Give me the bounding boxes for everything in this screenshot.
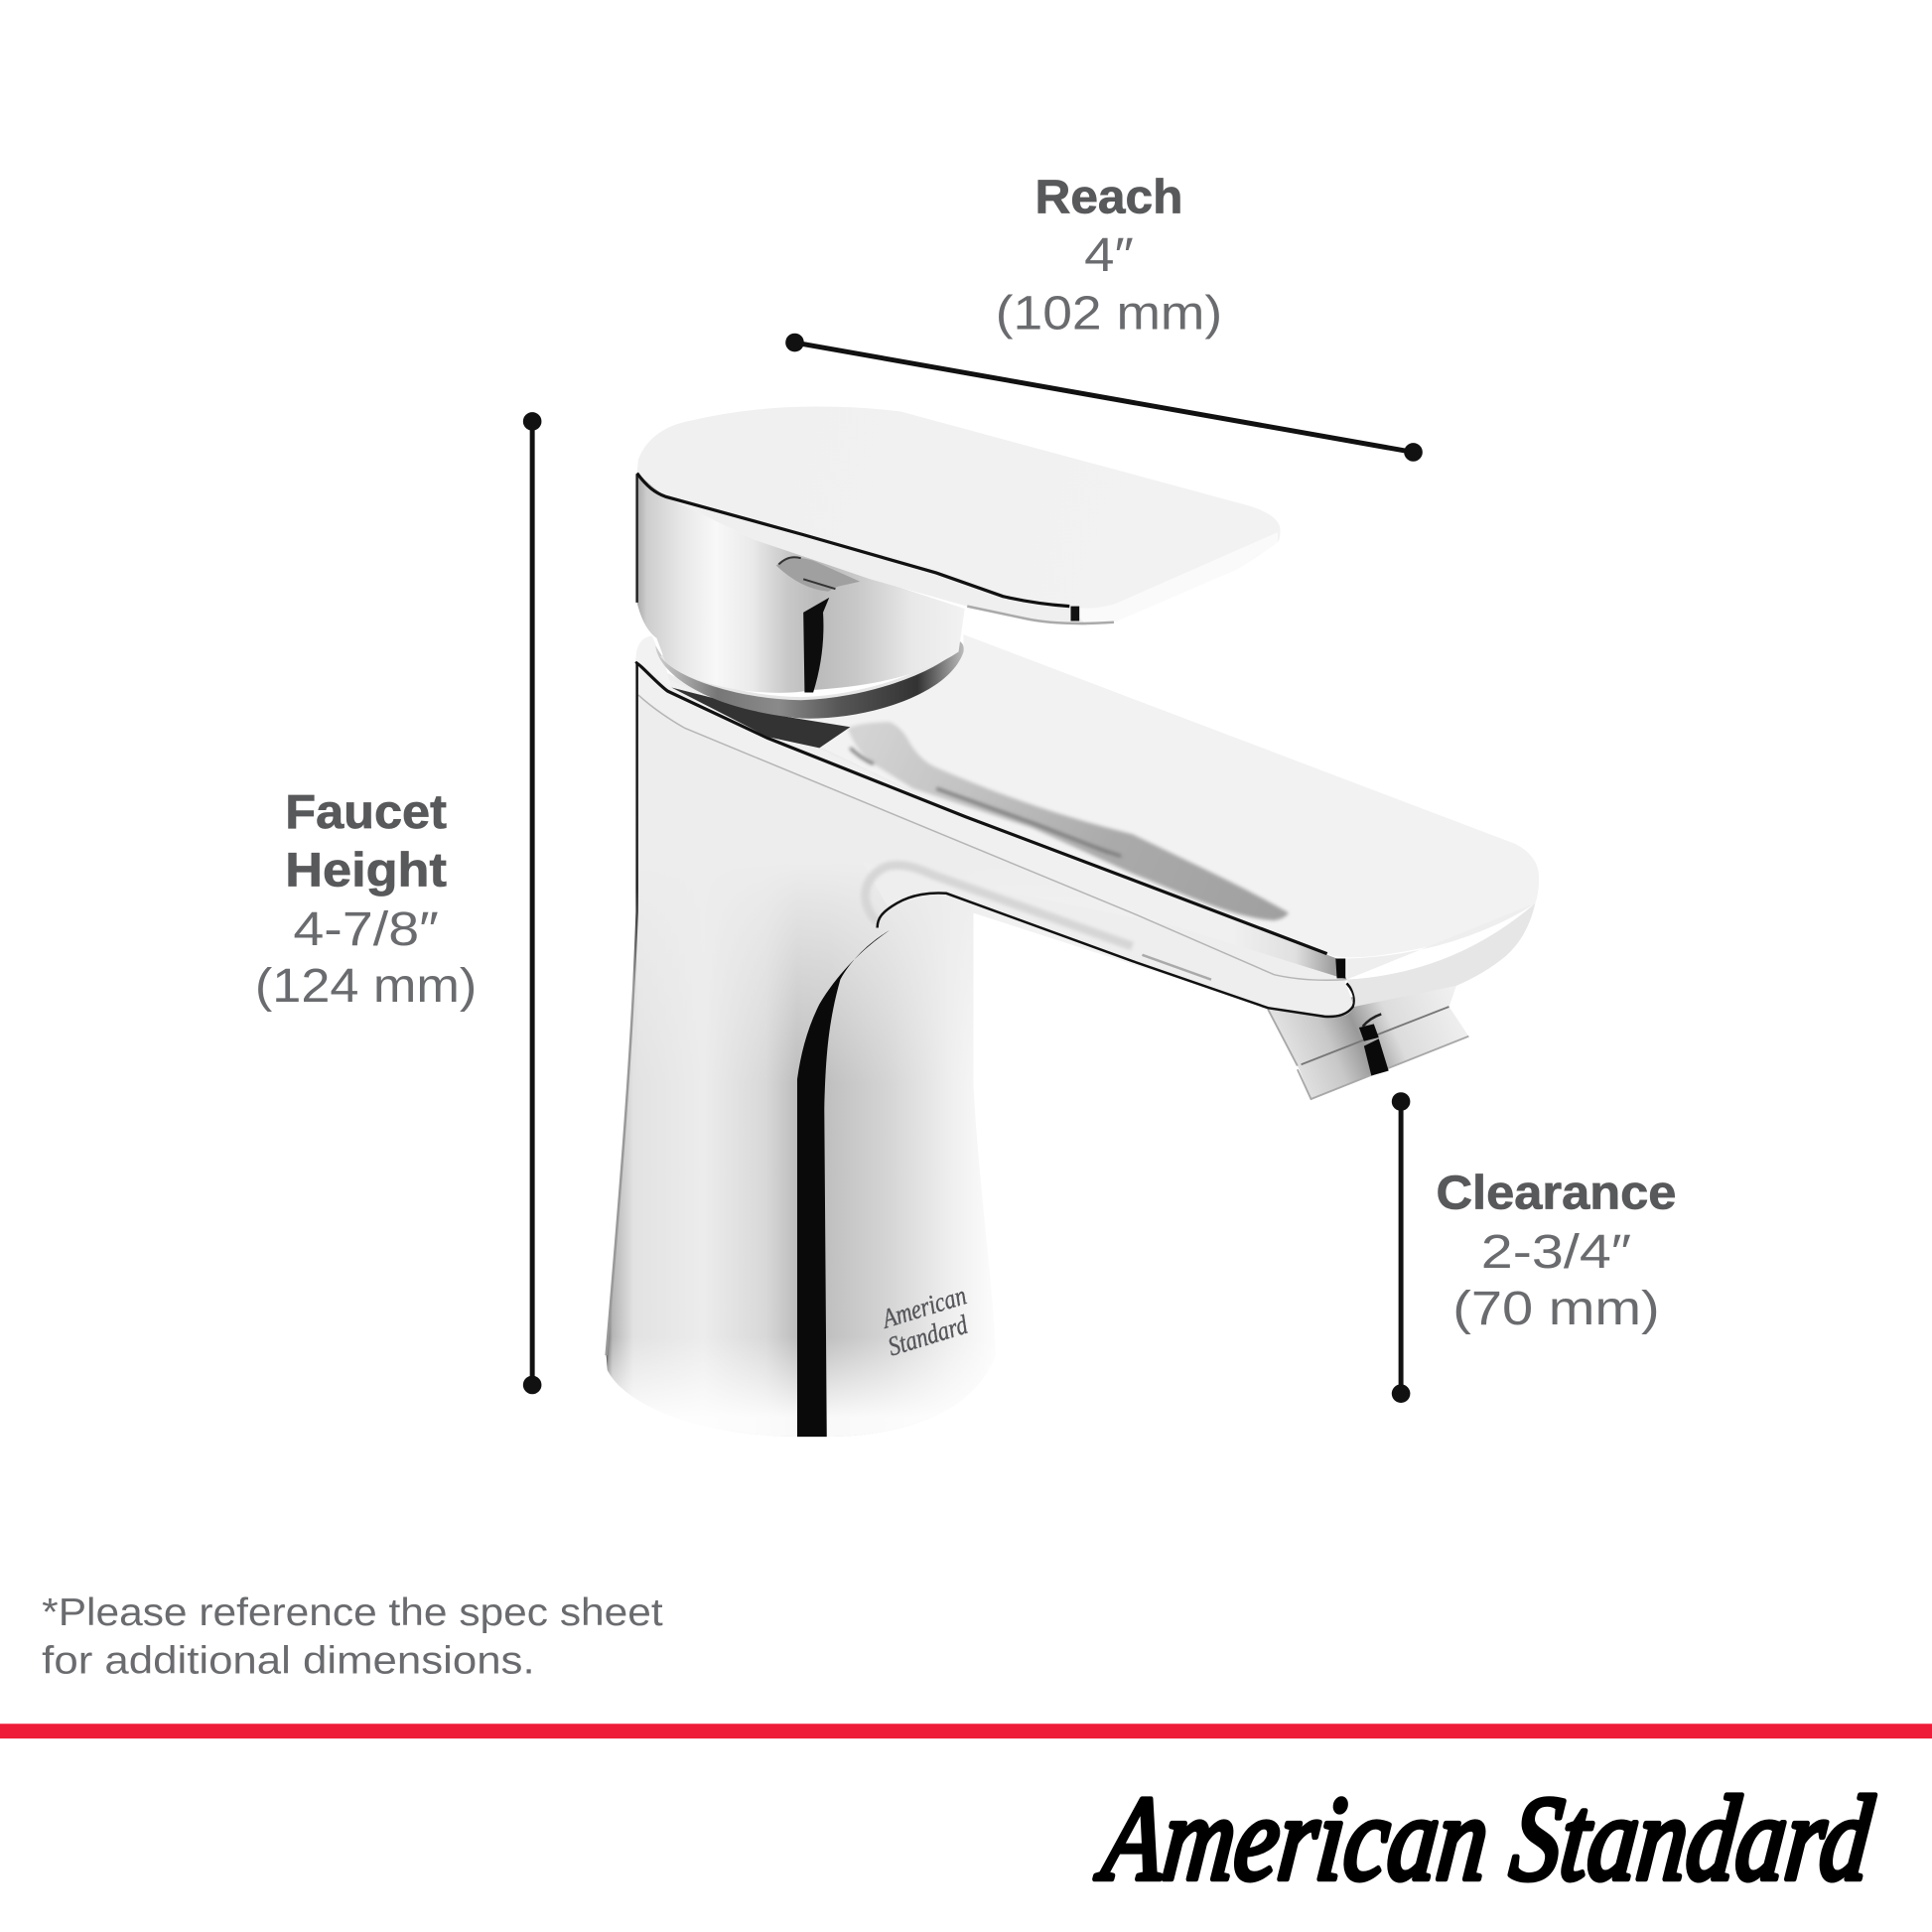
faucet logo: American	[877, 1280, 970, 1334]
chrome under ring	[671, 688, 850, 748]
faucet height leader line	[523, 412, 541, 1394]
arch black line	[878, 893, 1354, 1017]
clearance label: 2-3/4″	[1481, 1225, 1631, 1279]
faucet height label: Faucet	[285, 785, 447, 839]
body dark reflection strip	[797, 930, 890, 1437]
faucet logo	[877, 1280, 978, 1362]
handle body	[637, 474, 965, 693]
arch highlight	[866, 865, 1133, 946]
footnote	[42, 1591, 663, 1682]
spout lower highlight line	[1142, 955, 1211, 980]
faucet height label: (124 mm)	[255, 959, 477, 1013]
spout end tick	[1335, 959, 1345, 978]
reach label	[996, 171, 1222, 340]
reach label: Reach	[1035, 171, 1182, 224]
body left edge	[607, 661, 637, 1355]
spout band	[638, 665, 1346, 980]
faucet body and spout silhouette	[607, 658, 1354, 1437]
footnote: *Please reference the spec sheet	[42, 1591, 663, 1634]
spout upper chrome	[863, 863, 1354, 1017]
reach leader line	[785, 334, 1423, 462]
faucet illustration	[607, 407, 1539, 1437]
footnote: for additional dimensions.	[42, 1639, 535, 1682]
aerator	[1268, 986, 1468, 1099]
spout lower face	[1346, 903, 1535, 1007]
reach label: 4″	[1084, 228, 1134, 282]
faucet height label	[255, 785, 477, 1013]
clearance label: Clearance	[1436, 1166, 1676, 1219]
red divider	[0, 1724, 1932, 1738]
faucet height label: Height	[285, 843, 447, 897]
reach label: (102 mm)	[996, 286, 1222, 340]
dimension: faucet height	[255, 412, 541, 1394]
spout top plate	[801, 634, 1539, 957]
collar ring	[655, 640, 964, 719]
clearance label	[1436, 1166, 1676, 1335]
handle top plate	[637, 407, 1280, 625]
spout chrome reflection	[848, 722, 1289, 920]
clearance leader line	[1392, 1092, 1410, 1403]
spout dark edge	[635, 661, 1327, 954]
dimension: reach	[785, 171, 1423, 462]
faucet height label: 4-7/8″	[293, 902, 439, 956]
faucet logo: Standard	[885, 1310, 971, 1362]
reflection dark streaks	[850, 748, 1121, 857]
clearance label: (70 mm)	[1452, 1282, 1660, 1335]
upper body fade	[635, 658, 1354, 1084]
dimension: clearance	[1392, 1092, 1676, 1403]
base highlight	[608, 1337, 996, 1437]
collar lip	[635, 635, 671, 688]
